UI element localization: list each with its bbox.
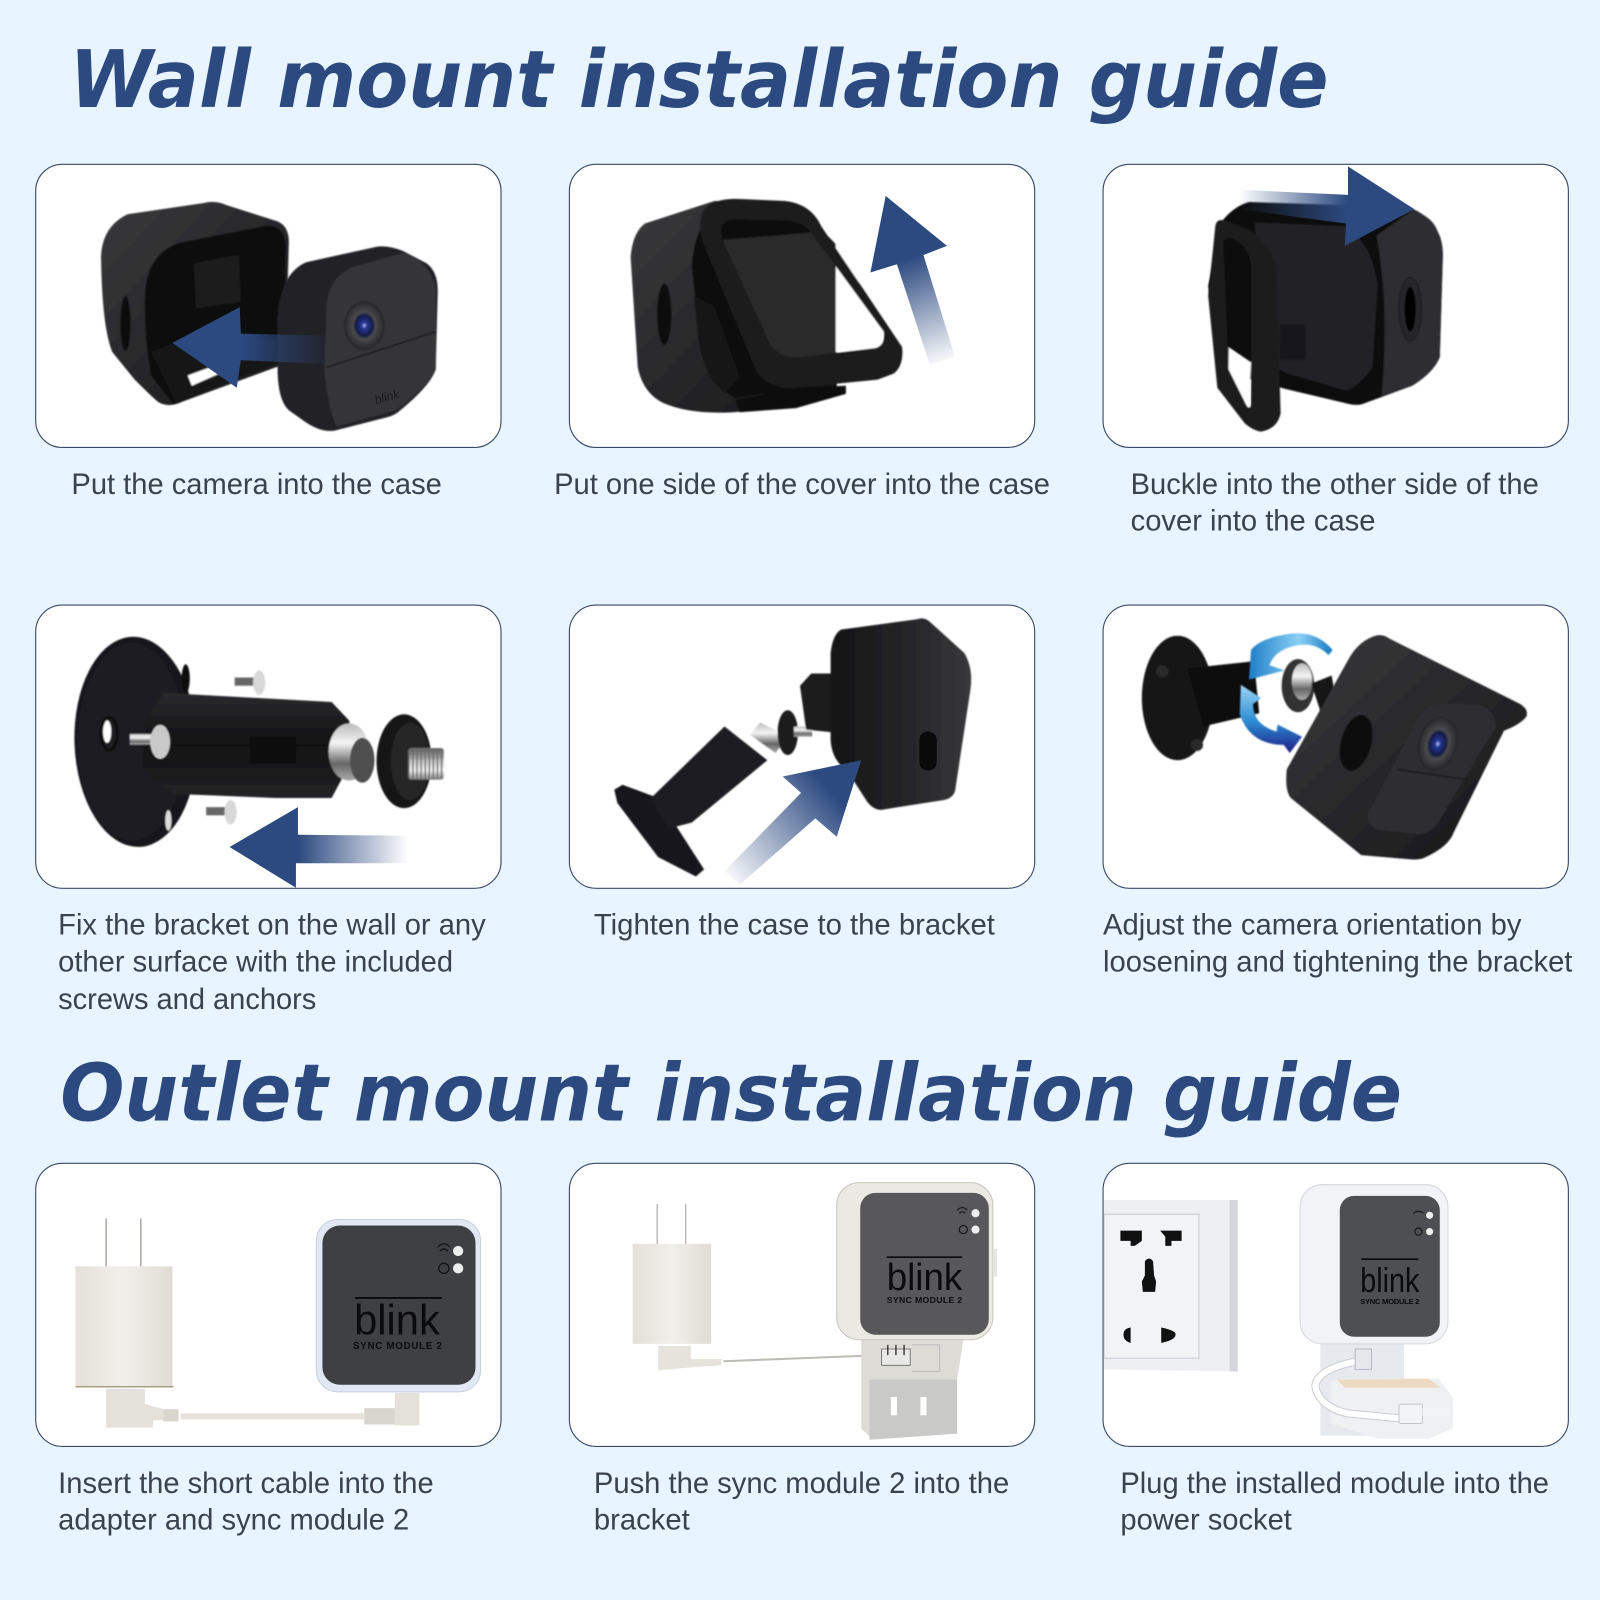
sync module [316,1219,481,1392]
caption row 3 [58,1467,1549,1537]
bracket [1142,636,1337,760]
caption row 2 [58,909,1572,1016]
title: wall mount: Wall mount installation guide [69,33,1329,126]
arrow: diagonal [724,760,861,885]
caption row 1: Buckle into the other side of the [1131,468,1539,501]
sync module in holder: SYNC MODULE 2 [1360,1297,1419,1306]
panel: insert short cable [36,1163,501,1446]
bracket and module: blink [887,1256,962,1298]
arrow: rotate up [1249,633,1333,680]
caption row 1: Put one side of the cover into the case [554,468,1050,501]
adapter and cable [1315,1327,1453,1439]
panel: adjust orientation [1103,605,1568,888]
arrow: right [1239,166,1414,246]
panel: put camera into case [36,164,501,447]
caption row 3: adapter and sync module 2 [58,1504,409,1537]
camera [278,246,438,431]
screw top [235,670,265,695]
screw bottom [206,800,237,824]
wall socket [1104,1200,1238,1371]
panel: plug into socket [1103,1163,1568,1446]
bracket [614,673,857,877]
bracket and module [837,1183,997,1440]
cover frame [1208,220,1305,432]
title: outlet mount: Outlet mount installation guide [60,1046,1402,1139]
caption row 3: Plug the installed module into the [1120,1467,1549,1500]
caption row 1: Put the camera into the case [71,468,442,501]
caption row 2: screws and anchors [58,983,316,1016]
panel: push sync module [569,1163,1035,1446]
sync module: blink [354,1297,440,1345]
arrow: left [230,807,408,888]
panel: fix the bracket [36,605,501,888]
adapter [76,1218,173,1387]
caption row 3: Push the sync module 2 into the [594,1467,1009,1500]
case body [1208,202,1443,405]
case [101,202,289,405]
caption row 1: cover into the case [1131,505,1376,538]
caption row 3: power socket [1120,1504,1292,1537]
sync module in holder [1300,1185,1448,1344]
caption row 3: Insert the short cable into the [58,1467,434,1500]
bracket and module: SYNC MODULE 2 [887,1295,962,1305]
panel: buckle cover [1103,164,1568,447]
camera [1286,635,1527,860]
cable [106,1389,419,1428]
caption row 2: loosening and tightening the bracket [1103,945,1572,978]
panel: tighten the case [569,605,1035,888]
bracket [71,635,444,849]
speaker [919,732,937,770]
arrow: rotate down [1240,685,1302,753]
screw center [130,724,170,759]
sync module: SYNC MODULE 2 [353,1341,442,1352]
arrow: up [870,196,955,364]
caption row 2: Adjust the camera orientation by [1103,909,1522,942]
caption row 2: other surface with the included [58,945,453,978]
caption row 2: Fix the bracket on the wall or any [58,909,486,942]
caption row 1 [71,468,1539,538]
panel: put one side of cover [569,164,1035,447]
arrow: left [172,307,332,388]
caption row 2: Tighten the case to the bracket [594,909,995,942]
caption row 3: bracket [594,1504,690,1537]
adapter [633,1204,882,1370]
case [831,618,971,810]
sync module in holder: blink [1360,1262,1420,1300]
case and cover [631,199,902,413]
logo: blink [373,387,402,407]
